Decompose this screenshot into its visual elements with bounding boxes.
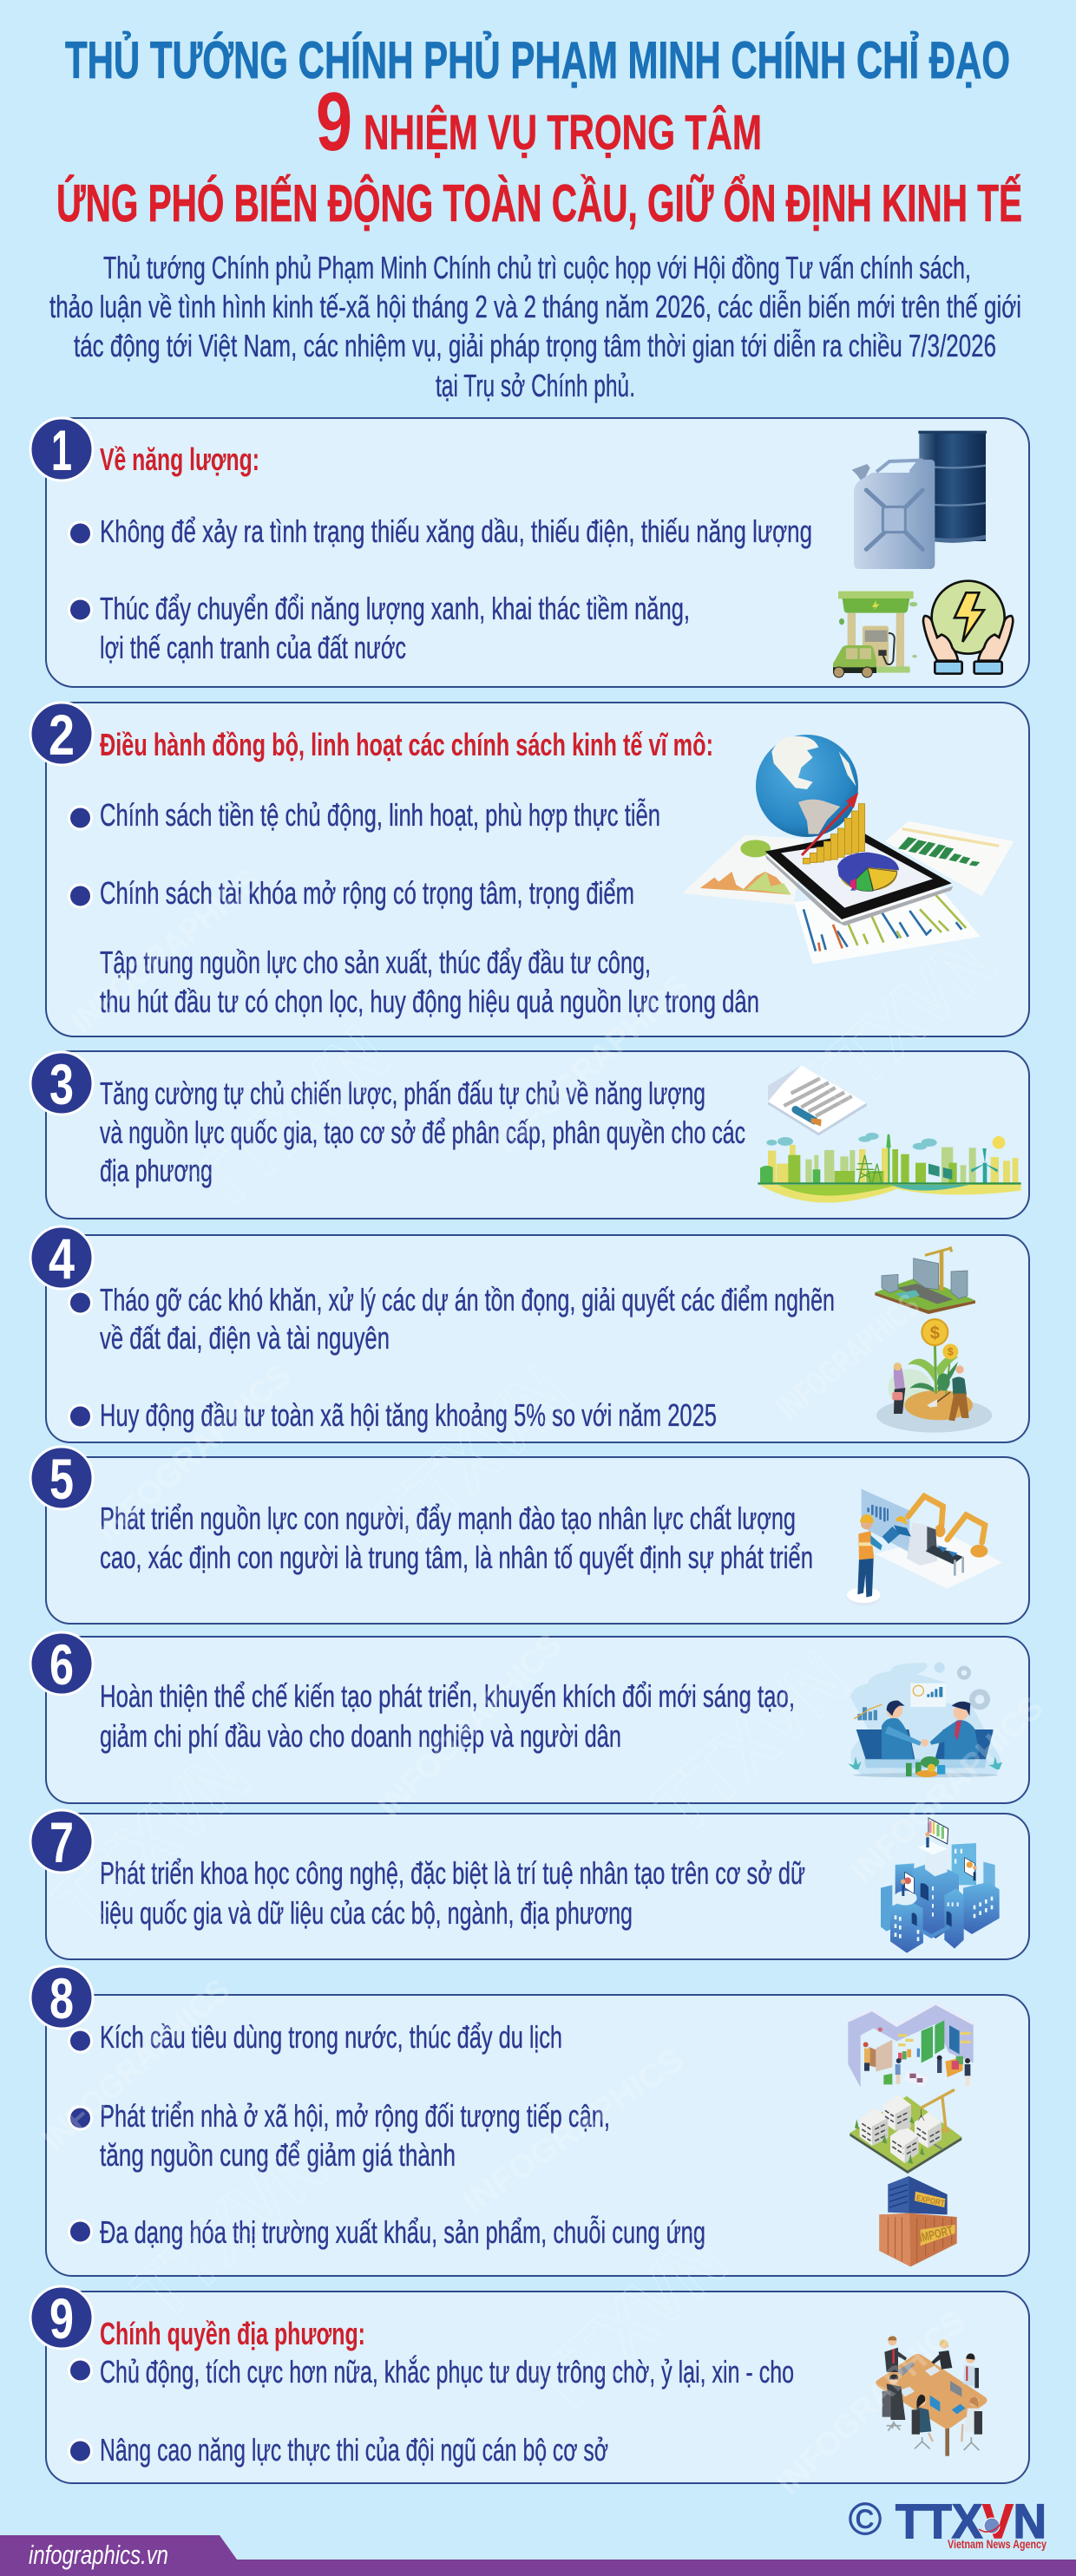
text: thu hút đầu tư có chọn lọc, huy động hiệu quả nguồn lực trong dân (100, 984, 759, 1019)
icon: export and import containers (879, 2176, 957, 2266)
panel: 2 macro policy (30, 703, 1029, 1036)
number badge 3: 3 (49, 1052, 74, 1116)
number badge 5 (30, 1447, 93, 1511)
bullet (69, 2359, 92, 2382)
bullet (69, 1405, 92, 1428)
watermark: INFOGRAPHICS (36, 1971, 237, 2159)
watermark: INFOGRAPHICS (371, 1627, 568, 1824)
icon: green fuel station (833, 592, 917, 677)
icon: globe tablet and charts (682, 735, 1014, 964)
number badge 5: 5 (49, 1447, 74, 1511)
text: Tăng cường tự chủ chiến lược, phấn đấu tự chủ về năng lượng (100, 1076, 705, 1111)
number badge 6 (30, 1632, 93, 1697)
text: về đất đai, điện và tài nguyên (100, 1320, 390, 1356)
text (100, 1282, 835, 1356)
text: Phát triển nguồn lực con người, đẩy mạnh đào tạo nhân lực chất lượng (100, 1500, 796, 1536)
watermark: INFOGRAPHICS (770, 2304, 973, 2501)
bullet (69, 2107, 92, 2129)
text: Nâng cao năng lực thực thi của đội ngũ cán bộ cơ sở (100, 2432, 608, 2468)
number badge 7: 7 (49, 1810, 74, 1874)
number badge 4: 4 (49, 1226, 75, 1291)
text: địa phương (100, 1153, 213, 1188)
text (100, 1076, 745, 1188)
number badge 9: 9 (49, 2286, 74, 2350)
number badge 2 (30, 703, 93, 767)
intro text (49, 250, 1021, 403)
watermark: INFOGRAPHICS (771, 1287, 927, 1427)
text: giảm chi phí đầu vào cho doanh nghiệp và người dân (100, 1718, 621, 1754)
logo: TTXVN: © (849, 2494, 882, 2545)
watermark: TTXVN (117, 2121, 344, 2337)
text: Phát triển nhà ở xã hội, mở rộng đối tượng tiếp cận, (100, 2098, 610, 2134)
watermark: INFOGRAPHICS (489, 968, 697, 1161)
icon: shopping mall (848, 2002, 974, 2088)
text: cao, xác định con người là trung tâm, là nhân tố quyết định sự phát triển (100, 1540, 813, 1575)
panel: 5 human resources (30, 1447, 1029, 1624)
text: Chính sách tài khóa mở rộng có trọng tâm, trọng điểm (100, 875, 634, 911)
title (56, 31, 1022, 232)
text: Thúc đẩy chuyển đổi năng lượng xanh, khai thác tiềm năng, (100, 591, 690, 626)
bullet (69, 2220, 92, 2243)
heading: Chính quyền địa phương: (100, 2316, 365, 2351)
text: Không để xảy ra tình trạng thiếu xăng dầu, thiếu điện, thiếu năng lượng (100, 513, 812, 549)
icon: hands holding energy (923, 581, 1013, 674)
number badge 3 (30, 1052, 93, 1116)
number badge 1: 1 (51, 418, 72, 482)
icon: document and pen (768, 1065, 867, 1135)
watermark: TTXVN (638, 1635, 865, 1852)
logo: TTXVN: Vietnam News Agency (948, 2538, 1046, 2551)
panel: 3 self-reliance (30, 1051, 1029, 1219)
panel: 7 science and technology (30, 1810, 1029, 1959)
icon: export and import containers: IMPORT (918, 2223, 955, 2245)
panel: 8 demand and markets (30, 1966, 1029, 2276)
icon: construction site (875, 1246, 975, 1314)
text: Chủ động, tích cực hơn nữa, khắc phục tư duy trông chờ, ỷ lại, xin - cho (100, 2354, 794, 2390)
title: NHIỆM VỤ TRỌNG TÂM (364, 104, 762, 160)
text: Chính sách tiền tệ chủ động, linh hoạt, phù hợp thực tiễn (100, 797, 660, 833)
panel: 9 local government (30, 2286, 1029, 2483)
icon: money plant: $ (930, 1324, 940, 1343)
icon: handshake between screens (848, 1663, 1002, 1777)
bullet (69, 1291, 92, 1314)
watermark: INFOGRAPHICS (64, 862, 267, 1041)
bullet (69, 598, 92, 621)
footer bar: infographics.vn (29, 2540, 168, 2570)
number badge 8 (30, 1966, 93, 2030)
watermark (36, 862, 1051, 2501)
footer bar (0, 2535, 1076, 2576)
icon: engineer and robot factory (847, 1489, 1002, 1606)
icon: smart city data (881, 1818, 1000, 1953)
text: Phát triển khoa học công nghệ, đặc biệt là trí tuệ nhân tạo trên cơ sở dữ (100, 1855, 805, 1891)
text (100, 1678, 795, 1754)
icon: export and import containers: EXPORT (915, 2194, 946, 2208)
icon: money plant: $ (948, 1346, 954, 1358)
text (100, 945, 759, 1019)
bullet (69, 2440, 92, 2462)
heading: Về năng lượng: (100, 441, 259, 477)
icon: green city skyline (758, 1133, 1021, 1203)
title: 9 (316, 75, 352, 168)
text: Huy động đầu tư toàn xã hội tăng khoảng 5% so với năm 2025 (100, 1397, 717, 1433)
watermark: TTXVN (360, 1349, 587, 1566)
watermark: TTXVN (516, 2216, 744, 2433)
text: Tập trung nguồn lực cho sản xuất, thúc đẩy đầu tư công, (100, 945, 651, 980)
text (100, 2098, 610, 2173)
panel: 1 energy (30, 418, 1029, 687)
icon: apartment buildings (850, 2089, 961, 2174)
number badge 8: 8 (49, 1966, 74, 2030)
text (100, 591, 690, 665)
bullet (69, 885, 92, 907)
number badge 7 (30, 1810, 93, 1874)
text: và nguồn lực quốc gia, tạo cơ sở để phân cấp, phân quyền cho các (100, 1115, 745, 1150)
watermark: TTXVN (178, 1010, 405, 1227)
text: tăng nguồn cung để giảm giá thành (100, 2137, 456, 2173)
text: Đa dạng hóa thị trường xuất khẩu, sản phẩm, chuỗi cung ứng (100, 2214, 705, 2250)
text (100, 1500, 813, 1575)
number badge 4 (30, 1226, 93, 1291)
watermark: INFOGRAPHICS (90, 1357, 299, 1550)
panel: 6 institutions (30, 1632, 1029, 1803)
number badge 6: 6 (49, 1632, 74, 1697)
text: liệu quốc gia và dữ liệu của các bộ, ngành, địa phương (100, 1895, 633, 1931)
heading: Điều hành đồng bộ, linh hoạt các chính sách kinh tế vĩ mô: (100, 727, 713, 762)
watermark: INFOGRAPHICS (456, 2042, 691, 2220)
watermark: TTXVN (785, 915, 1013, 1132)
number badge 2: 2 (49, 703, 75, 767)
text: lợi thế cạnh tranh của đất nước (100, 630, 406, 665)
number badge 1 (30, 418, 93, 482)
icon: oil barrel and jerrycan (852, 431, 987, 569)
text (100, 1855, 805, 1931)
number badge 9 (30, 2286, 93, 2350)
icon: money plant (876, 1319, 992, 1433)
bullet (69, 807, 92, 829)
panel: 4 unblock projects (30, 1226, 1029, 1442)
bullet (69, 522, 92, 545)
intro text: tại Trụ sở Chính phủ. (436, 368, 635, 403)
watermark: INFOGRAPHICS (844, 1690, 1051, 1890)
bullet (69, 2030, 92, 2052)
text: Kích cầu tiêu dùng trong nước, thúc đẩy du lịch (100, 2019, 562, 2055)
watermark: TTXVN (39, 1730, 266, 1947)
logo: TTXVN: TTXVN (896, 2494, 1046, 2548)
text: Hoàn thiện thể chế kiến tạo phát triển, khuyến khích đổi mới sáng tạo, (100, 1678, 795, 1714)
icon: meeting table (876, 2336, 987, 2456)
